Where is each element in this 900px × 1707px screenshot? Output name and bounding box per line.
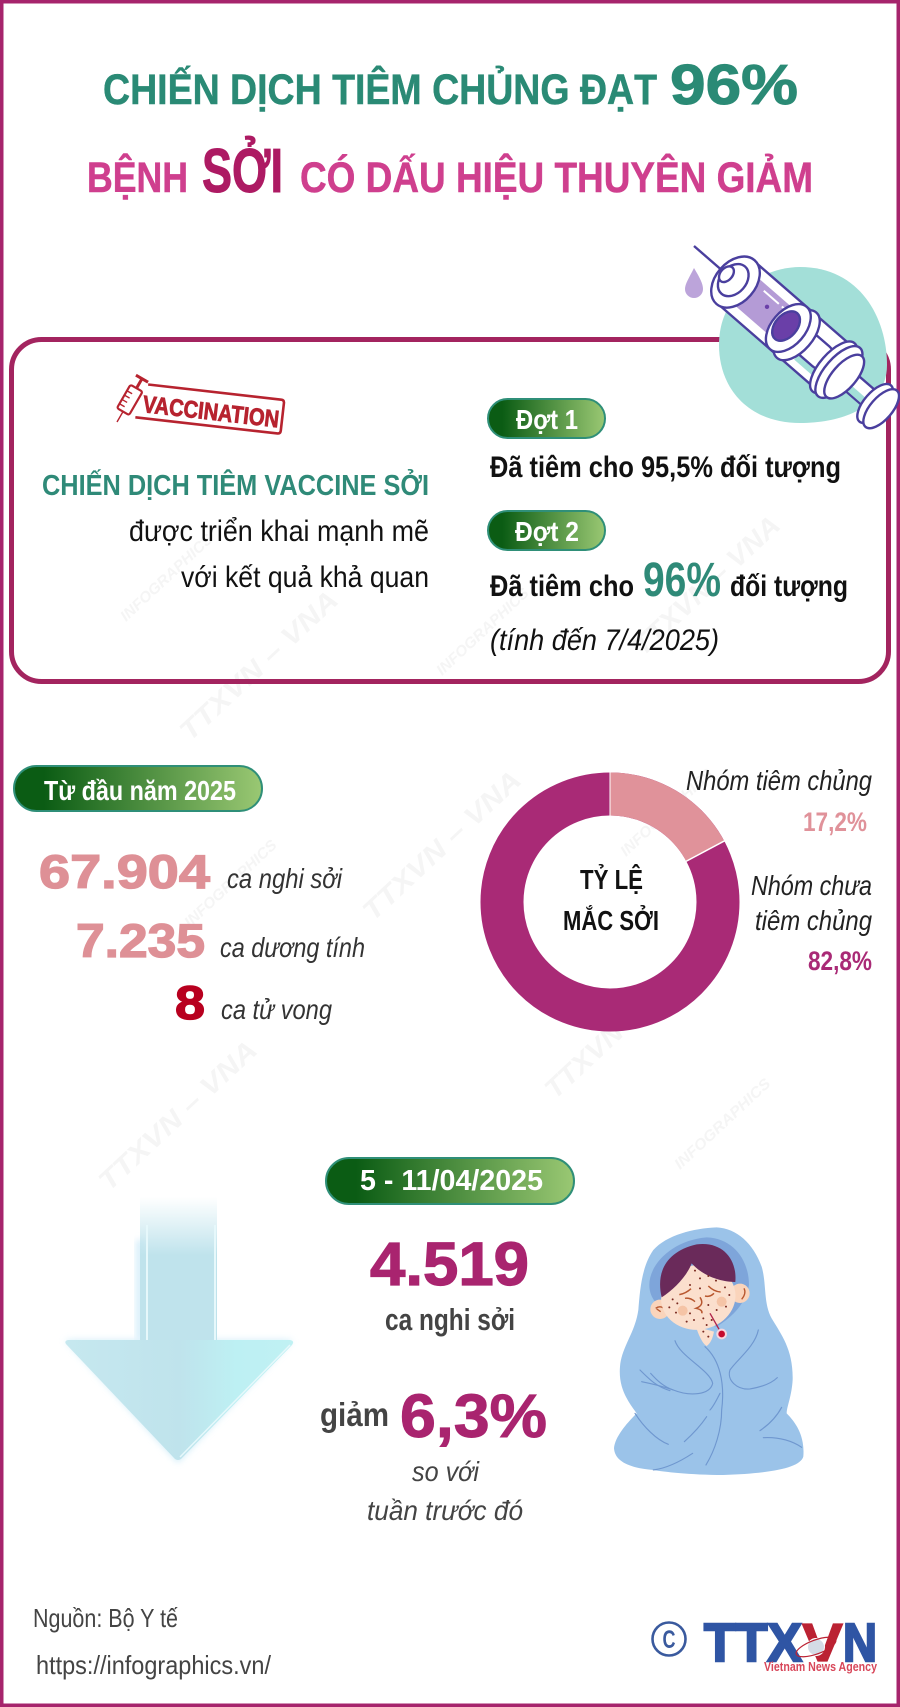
stamp: vaccination: VACCINATION [141, 391, 280, 433]
panel: vaccination campaign [12, 340, 888, 682]
result: round 2: 96% [643, 554, 721, 607]
icon: syringe [673, 222, 900, 440]
stat: positive cases [76, 914, 365, 967]
text: TTXVN – VNA [357, 765, 527, 926]
legend: unvaccinated group: tiêm chủng [755, 905, 872, 936]
pill: Đợt 1 [488, 399, 605, 438]
donut chart: infection rate [502, 765, 872, 1010]
logo: TTXVN [652, 1613, 878, 1674]
source note [33, 1603, 272, 1680]
source note: https://infographics.vn/ [36, 1650, 272, 1680]
chart centre label: MẮC SỞI [563, 904, 659, 936]
text: INFOGRAPHICS [433, 585, 532, 679]
legend: vaccinated group [686, 765, 872, 837]
section: week of 5-11/04/2025 [320, 1158, 574, 1526]
result: round 2: Đã tiêm cho [490, 570, 634, 603]
pill: Đợt 1: Đợt 1 [516, 404, 578, 435]
text: INFOGRAPHICS [671, 1075, 774, 1173]
stat: suspected cases [39, 845, 343, 898]
campaign description: CHIẾN DỊCH TIÊM VACCINE SỞI [42, 468, 429, 502]
date note: (tính đến 7/4/2025) [490, 624, 719, 657]
campaign description: được triển khai mạnh mẽ [129, 515, 429, 548]
chart centre label [563, 863, 659, 936]
logo: TTXVN: V [802, 1613, 843, 1673]
pill: date: 5 - 11/04/2025 [360, 1165, 543, 1197]
logo: TTXVN: C [662, 1626, 676, 1654]
stat: weekly decrease: giảm [320, 1396, 389, 1433]
text: INFOGRAPHICS [117, 531, 216, 625]
stat: weekly suspected cases: 4.519 [370, 1230, 529, 1298]
legend: unvaccinated group [751, 870, 872, 976]
text: TTXVN – VNA [539, 953, 698, 1104]
stat: suspected cases: 67.904 [39, 845, 210, 898]
stat: positive cases: ca dương tính [220, 932, 365, 963]
result: round 2: đối tượng [730, 570, 848, 603]
text: TTXVN – VNA [93, 1035, 263, 1196]
title [87, 53, 813, 206]
title line 1: CHIẾN DỊCH TIÊM CHỦNG ĐẠT [103, 65, 657, 114]
section: since start of 2025 [14, 766, 365, 1029]
pill: date [326, 1158, 574, 1204]
legend: unvaccinated group: 82,8% [808, 946, 872, 976]
title line 1 [103, 53, 798, 117]
text: TTXVN – VNA [627, 510, 786, 661]
stat: weekly decrease: so với [412, 1456, 480, 1487]
stat: deaths [175, 976, 332, 1029]
title line 1: 96% [670, 53, 798, 117]
legend: unvaccinated group: Nhóm chưa [751, 870, 872, 901]
logo: TTXVN: Vietnam News Agency [764, 1659, 878, 1674]
stat: positive cases: 7.235 [76, 914, 205, 967]
stat: weekly decrease: 6,3% [400, 1382, 547, 1450]
title line 2 [87, 137, 813, 206]
text: INFOGRAPHICS [617, 766, 716, 860]
legend: vaccinated group: Nhóm tiêm chủng [686, 765, 872, 796]
stat: deaths: 8 [175, 976, 205, 1029]
stat: weekly decrease [320, 1382, 547, 1526]
pill: Đợt 2: Đợt 2 [515, 516, 579, 547]
logo: TTXVN: N [843, 1613, 877, 1673]
campaign description [42, 468, 429, 594]
stat: weekly decrease: tuần trước đó [367, 1495, 523, 1526]
pill: Từ đầu năm 2025: Từ đầu năm 2025 [44, 775, 236, 806]
stat: suspected cases: ca nghi sởi [227, 863, 343, 894]
result: round 2 [490, 554, 848, 607]
title line 2: CÓ DẤU HIỆU THUYÊN GIẢM [300, 153, 813, 202]
title line 2: SỞI [202, 137, 283, 206]
text: TTXVN – VNA [174, 585, 344, 746]
text: INFOGRAPHICS [181, 837, 280, 931]
stamp: vaccination [111, 375, 284, 434]
campaign description: với kết quả khả quan [181, 561, 429, 594]
result: round 1: Đã tiêm cho 95,5% đối tượng [490, 451, 841, 484]
pill: Từ đầu năm 2025 [14, 766, 262, 811]
chart centre label: TỶ LỆ [580, 863, 643, 895]
pill: Đợt 2 [488, 511, 605, 550]
icon: sick child in blanket [614, 1227, 804, 1475]
source note: Nguồn: Bộ Y tế [33, 1603, 178, 1633]
stat: weekly suspected cases [370, 1230, 529, 1337]
stat: deaths: ca tử vong [221, 994, 332, 1025]
stat: weekly suspected cases: ca nghi sởi [385, 1302, 515, 1337]
arrow: downward trend [65, 1197, 293, 1463]
logo: TTXVN: TTX [704, 1613, 802, 1673]
title line 2: BỆNH [87, 153, 188, 202]
legend: vaccinated group: 17,2% [803, 807, 867, 837]
